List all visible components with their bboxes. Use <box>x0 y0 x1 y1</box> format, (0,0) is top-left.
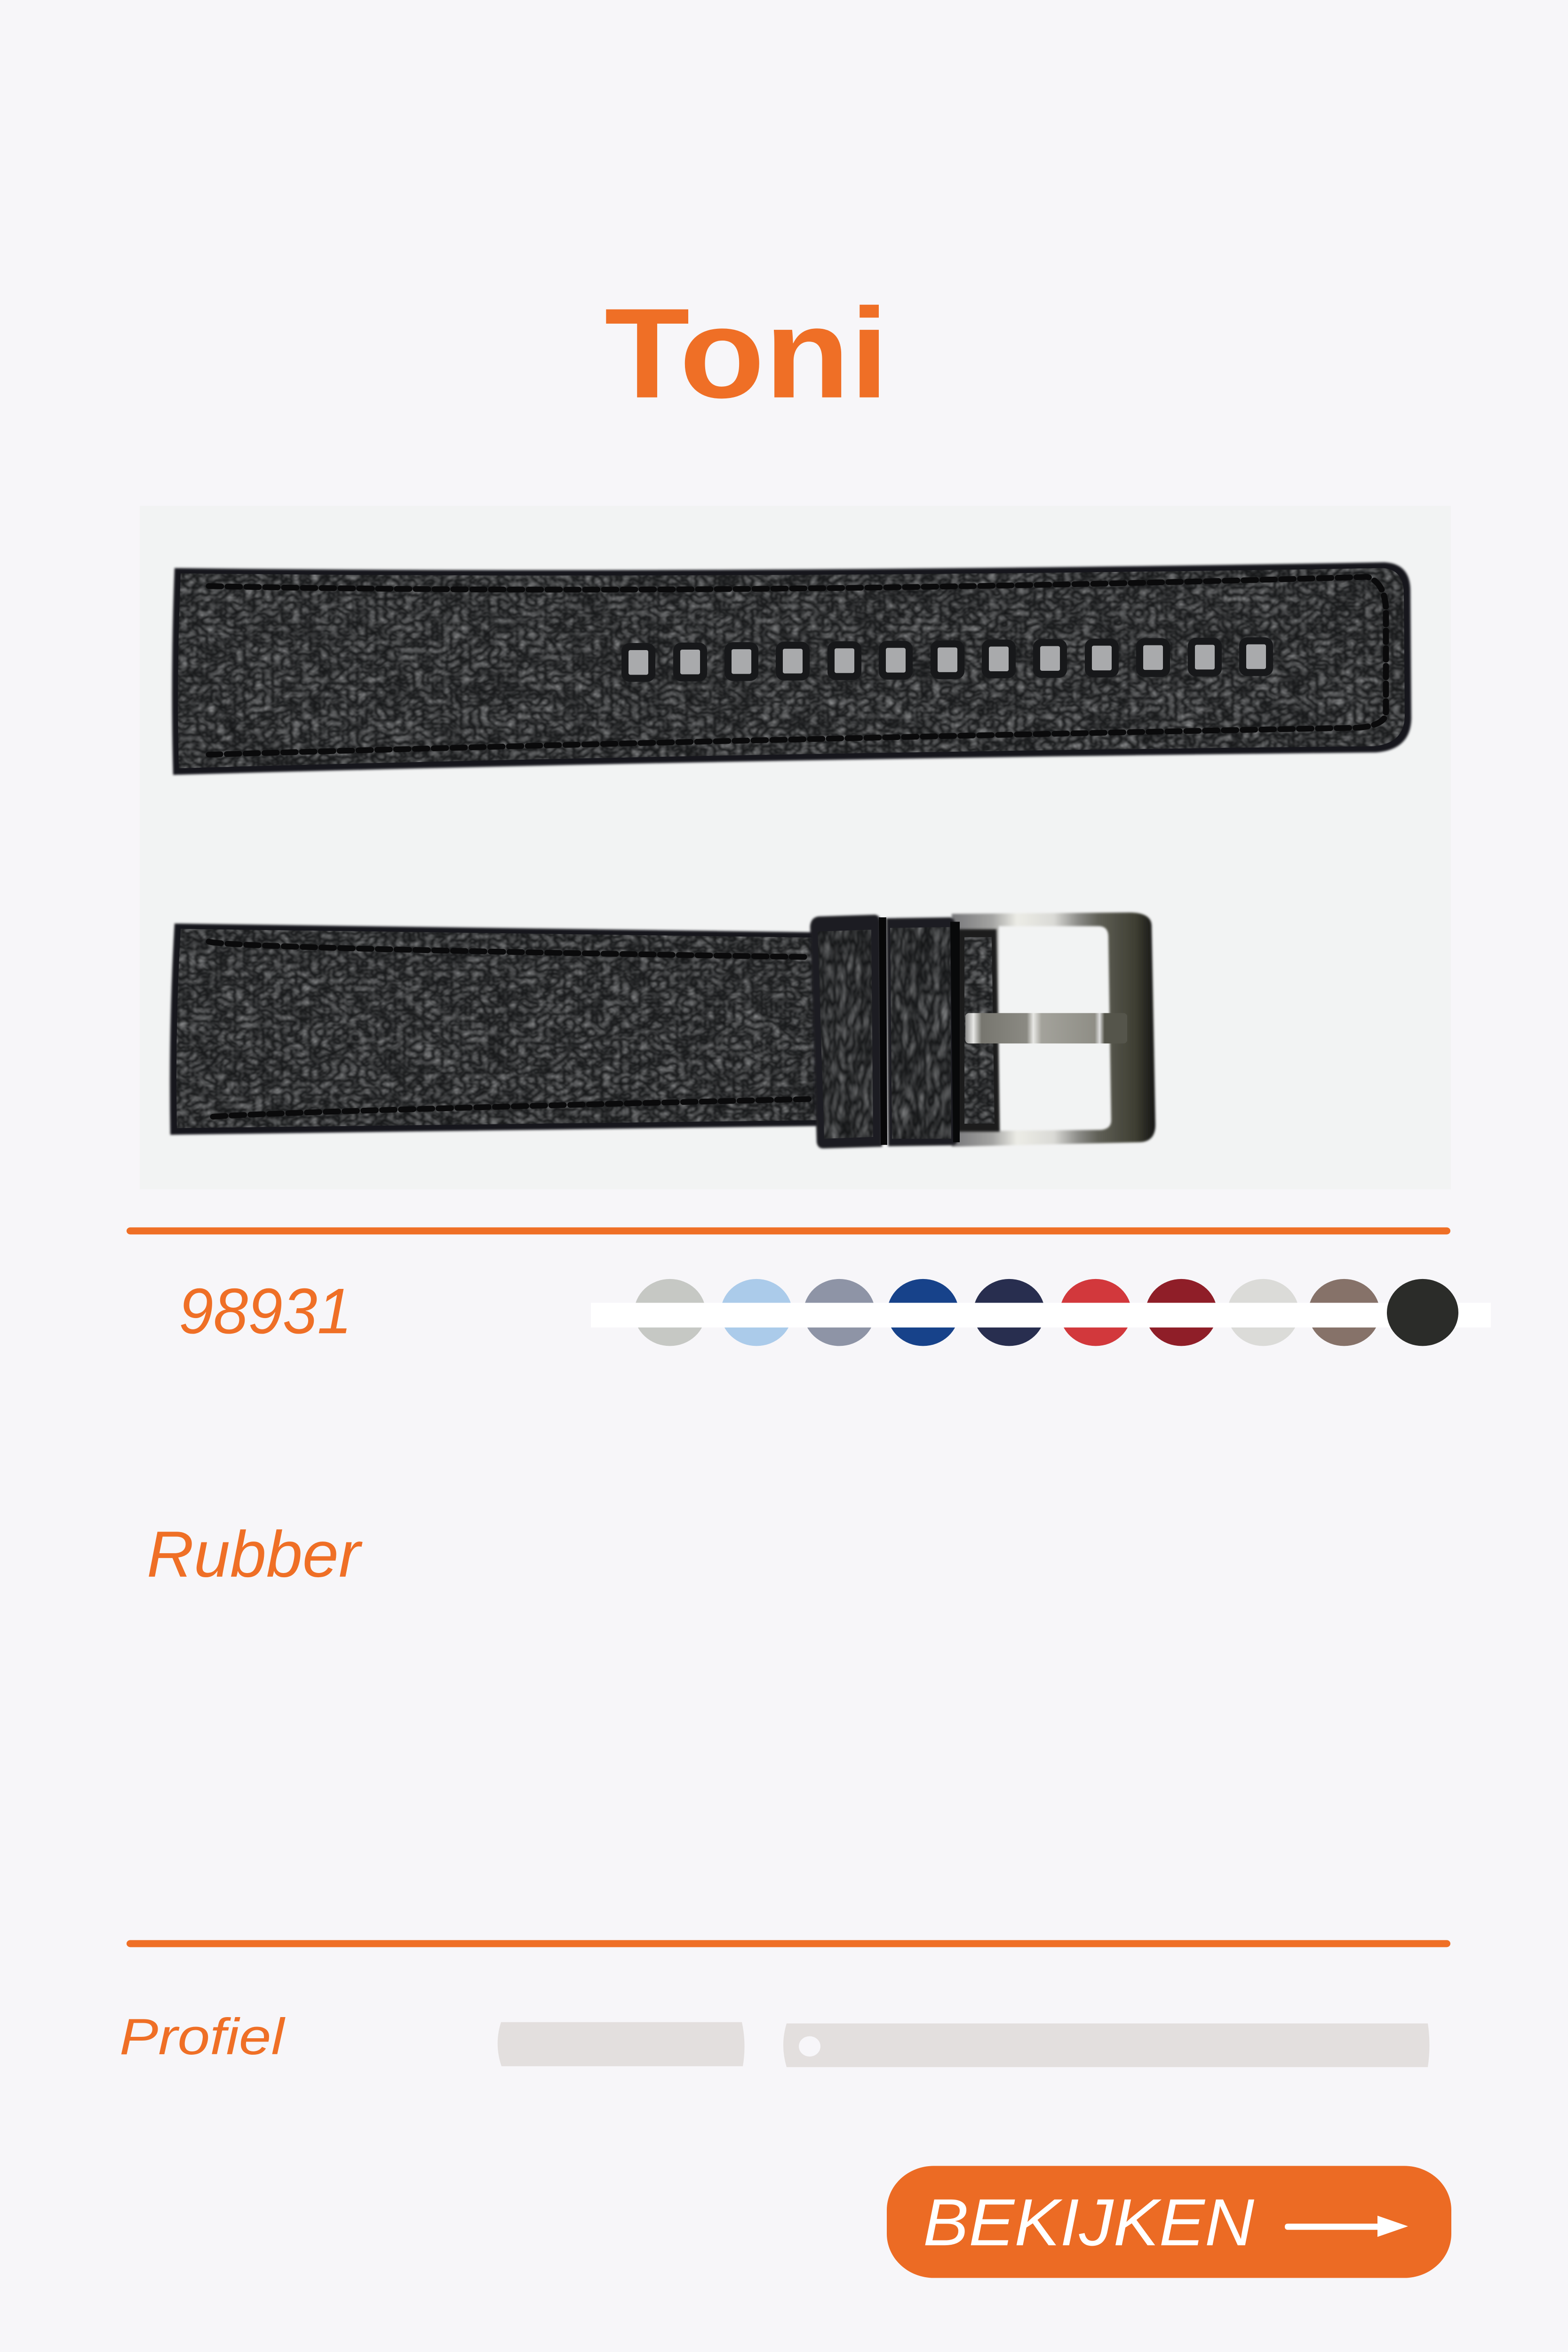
colour swatches <box>591 1279 1491 1346</box>
stitching <box>209 577 1386 755</box>
divider: top rule <box>127 1227 1450 1234</box>
title: Toni <box>605 282 889 425</box>
product number: 98931 <box>179 1275 352 1347</box>
top strap <box>172 562 1411 775</box>
black swatch <box>1387 1279 1458 1346</box>
material label: Rubber <box>147 1518 363 1591</box>
panel: product photo <box>140 506 1451 1190</box>
bottom strap <box>170 923 819 1135</box>
button <box>887 2166 1451 2278</box>
inner strap loop <box>955 929 1000 1132</box>
photo background <box>140 506 1451 1190</box>
divider: bottom rule <box>127 1940 1450 1947</box>
profile shape: long piece <box>783 2024 1429 2067</box>
strap keepers <box>810 914 960 1148</box>
profile label: Profiel <box>119 2008 286 2065</box>
profile hole <box>799 2036 820 2057</box>
button label: BEKIJKEN <box>923 2185 1254 2260</box>
arrow <box>1285 2216 1408 2237</box>
buckle frame <box>952 913 1155 1147</box>
strap holes <box>621 637 1273 682</box>
stitching <box>209 942 810 1117</box>
white band over swatches <box>591 1303 1491 1327</box>
buckle <box>952 913 1155 1147</box>
profile shape: short piece <box>498 2022 745 2066</box>
buckle tongue <box>965 1013 1127 1043</box>
